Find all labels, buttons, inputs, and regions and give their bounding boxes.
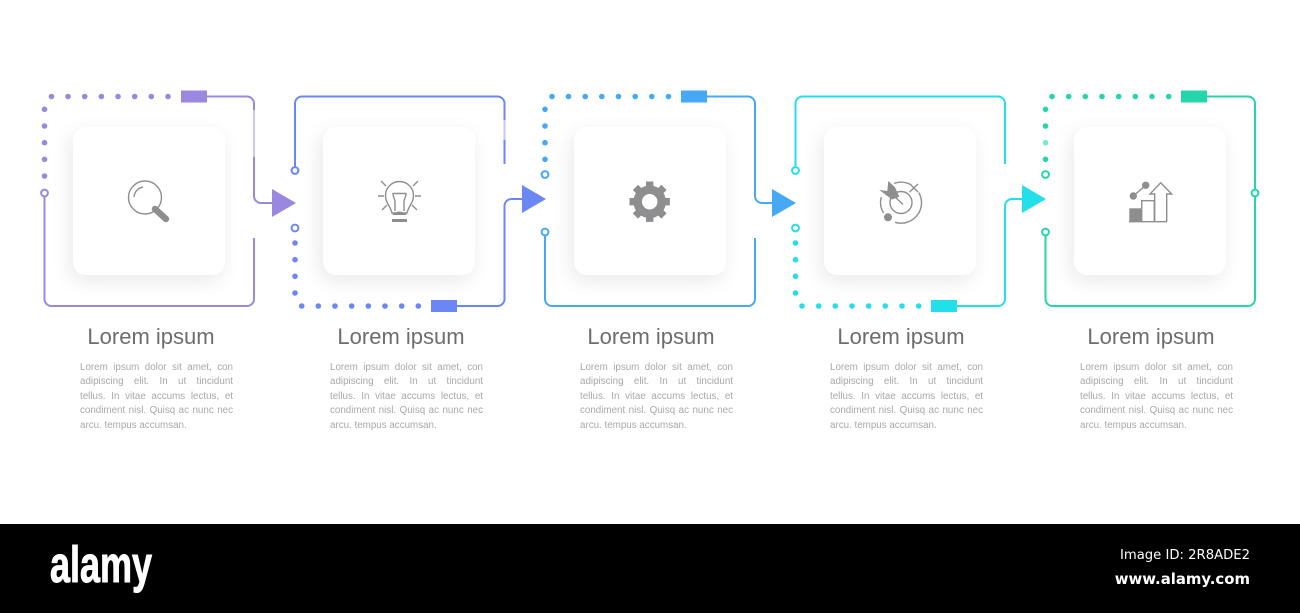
- step 2 frame, arrow and icon: [290, 96, 546, 312]
- step 4 text: condiment nisl. Quisq ac nunc nec: [830, 405, 983, 416]
- step 1 text: condiment nisl. Quisq ac nunc nec: [80, 405, 233, 416]
- step 1 text: tellus. In vitae accums lectus, et: [80, 391, 233, 402]
- step 3 text: [580, 362, 733, 431]
- step 5 text: adipiscing elit. In ut tincidunt: [1080, 376, 1233, 387]
- website: www.alamy.com: [1115, 570, 1250, 588]
- step 4 text: tellus. In vitae accums lectus, et: [830, 391, 983, 402]
- step 2 text: tellus. In vitae accums lectus, et: [330, 391, 483, 402]
- step 5 frame and icon: [1041, 90, 1260, 307]
- step 5 text: arcu. tempus accumsan.: [1080, 420, 1187, 431]
- icon: growth chart: [1129, 182, 1172, 222]
- connector line: [796, 96, 1024, 306]
- step 2: idea: [290, 96, 546, 431]
- step 3 card: [574, 127, 726, 275]
- step 1 frame, arrow and icon: [40, 90, 296, 307]
- step 2 text: adipiscing elit. In ut tincidunt: [330, 376, 483, 387]
- connector line: [545, 96, 774, 306]
- step 3 title: Lorem ipsum: [587, 324, 715, 349]
- arrow: [522, 185, 546, 213]
- rings: [542, 171, 548, 235]
- arrow: [272, 189, 296, 217]
- step 1 card: [73, 127, 225, 275]
- connector line: [295, 96, 524, 306]
- image id: Image ID: 2R8ADE2: [1120, 548, 1250, 563]
- step 1 text: Lorem ipsum dolor sit amet, con: [80, 362, 233, 373]
- step 3 text: arcu. tempus accumsan.: [580, 420, 687, 431]
- step 5 title: Lorem ipsum: [1087, 324, 1215, 349]
- step 5 text: tellus. In vitae accums lectus, et: [1080, 391, 1233, 402]
- step 4 text: arcu. tempus accumsan.: [830, 420, 937, 431]
- step 4 card: [824, 127, 976, 275]
- rings: [792, 167, 799, 231]
- step 2 text: [330, 362, 483, 431]
- alamy logo: alamy: [50, 536, 152, 593]
- step 1 text: arcu. tempus accumsan.: [80, 420, 187, 431]
- step 4 frame, arrow and icon: [791, 96, 1046, 312]
- dots: [793, 240, 922, 309]
- rings: [292, 167, 298, 231]
- dots: [1043, 94, 1171, 162]
- step 3: settings: [540, 90, 796, 431]
- step 1 text: [80, 362, 233, 431]
- step 2 title: Lorem ipsum: [337, 324, 465, 349]
- ring: [41, 190, 48, 196]
- icon: magnifying glass: [128, 181, 166, 219]
- arrow: [1022, 185, 1046, 213]
- step 2 text: Lorem ipsum dolor sit amet, con: [330, 362, 483, 373]
- icon: gear: [630, 182, 670, 222]
- step 5 text: Lorem ipsum dolor sit amet, con: [1080, 362, 1233, 373]
- step 3 text: Lorem ipsum dolor sit amet, con: [580, 362, 733, 373]
- step 3 frame, arrow and icon: [540, 90, 796, 307]
- step 4 text: [830, 362, 983, 431]
- step 2 card: [323, 127, 475, 275]
- step 5: growth: [1041, 90, 1260, 431]
- step 5 text: [1080, 362, 1233, 431]
- tab: [1181, 90, 1207, 102]
- step 2 text: arcu. tempus accumsan.: [330, 420, 437, 431]
- step 4: target: [791, 96, 1046, 431]
- dots: [292, 240, 421, 309]
- connector line: [1046, 96, 1255, 306]
- tab: [181, 90, 207, 102]
- arrow: [772, 189, 796, 217]
- rings: [1042, 171, 1258, 235]
- step 3 text: condiment nisl. Quisq ac nunc nec: [580, 405, 733, 416]
- step 4 title: Lorem ipsum: [837, 324, 965, 349]
- step 5 card: [1074, 127, 1226, 275]
- connector line: [44, 96, 274, 306]
- step 1 text: adipiscing elit. In ut tincidunt: [80, 376, 233, 387]
- step 1: search: [40, 90, 296, 431]
- tab: [431, 300, 457, 312]
- watermark footer bar: [0, 524, 1300, 613]
- step 4 text: adipiscing elit. In ut tincidunt: [830, 376, 983, 387]
- icon: light bulb: [378, 181, 421, 222]
- dots: [42, 94, 171, 179]
- step 3 text: tellus. In vitae accums lectus, et: [580, 391, 733, 402]
- step 4 text: Lorem ipsum dolor sit amet, con: [830, 362, 983, 373]
- step 3 text: adipiscing elit. In ut tincidunt: [580, 376, 733, 387]
- icon: target with dart: [879, 181, 922, 223]
- dots: [542, 94, 671, 162]
- step 1 title: Lorem ipsum: [87, 324, 215, 349]
- tab: [931, 300, 957, 312]
- step 5 text: condiment nisl. Quisq ac nunc nec: [1080, 405, 1233, 416]
- tab: [681, 90, 707, 102]
- step 2 text: condiment nisl. Quisq ac nunc nec: [330, 405, 483, 416]
